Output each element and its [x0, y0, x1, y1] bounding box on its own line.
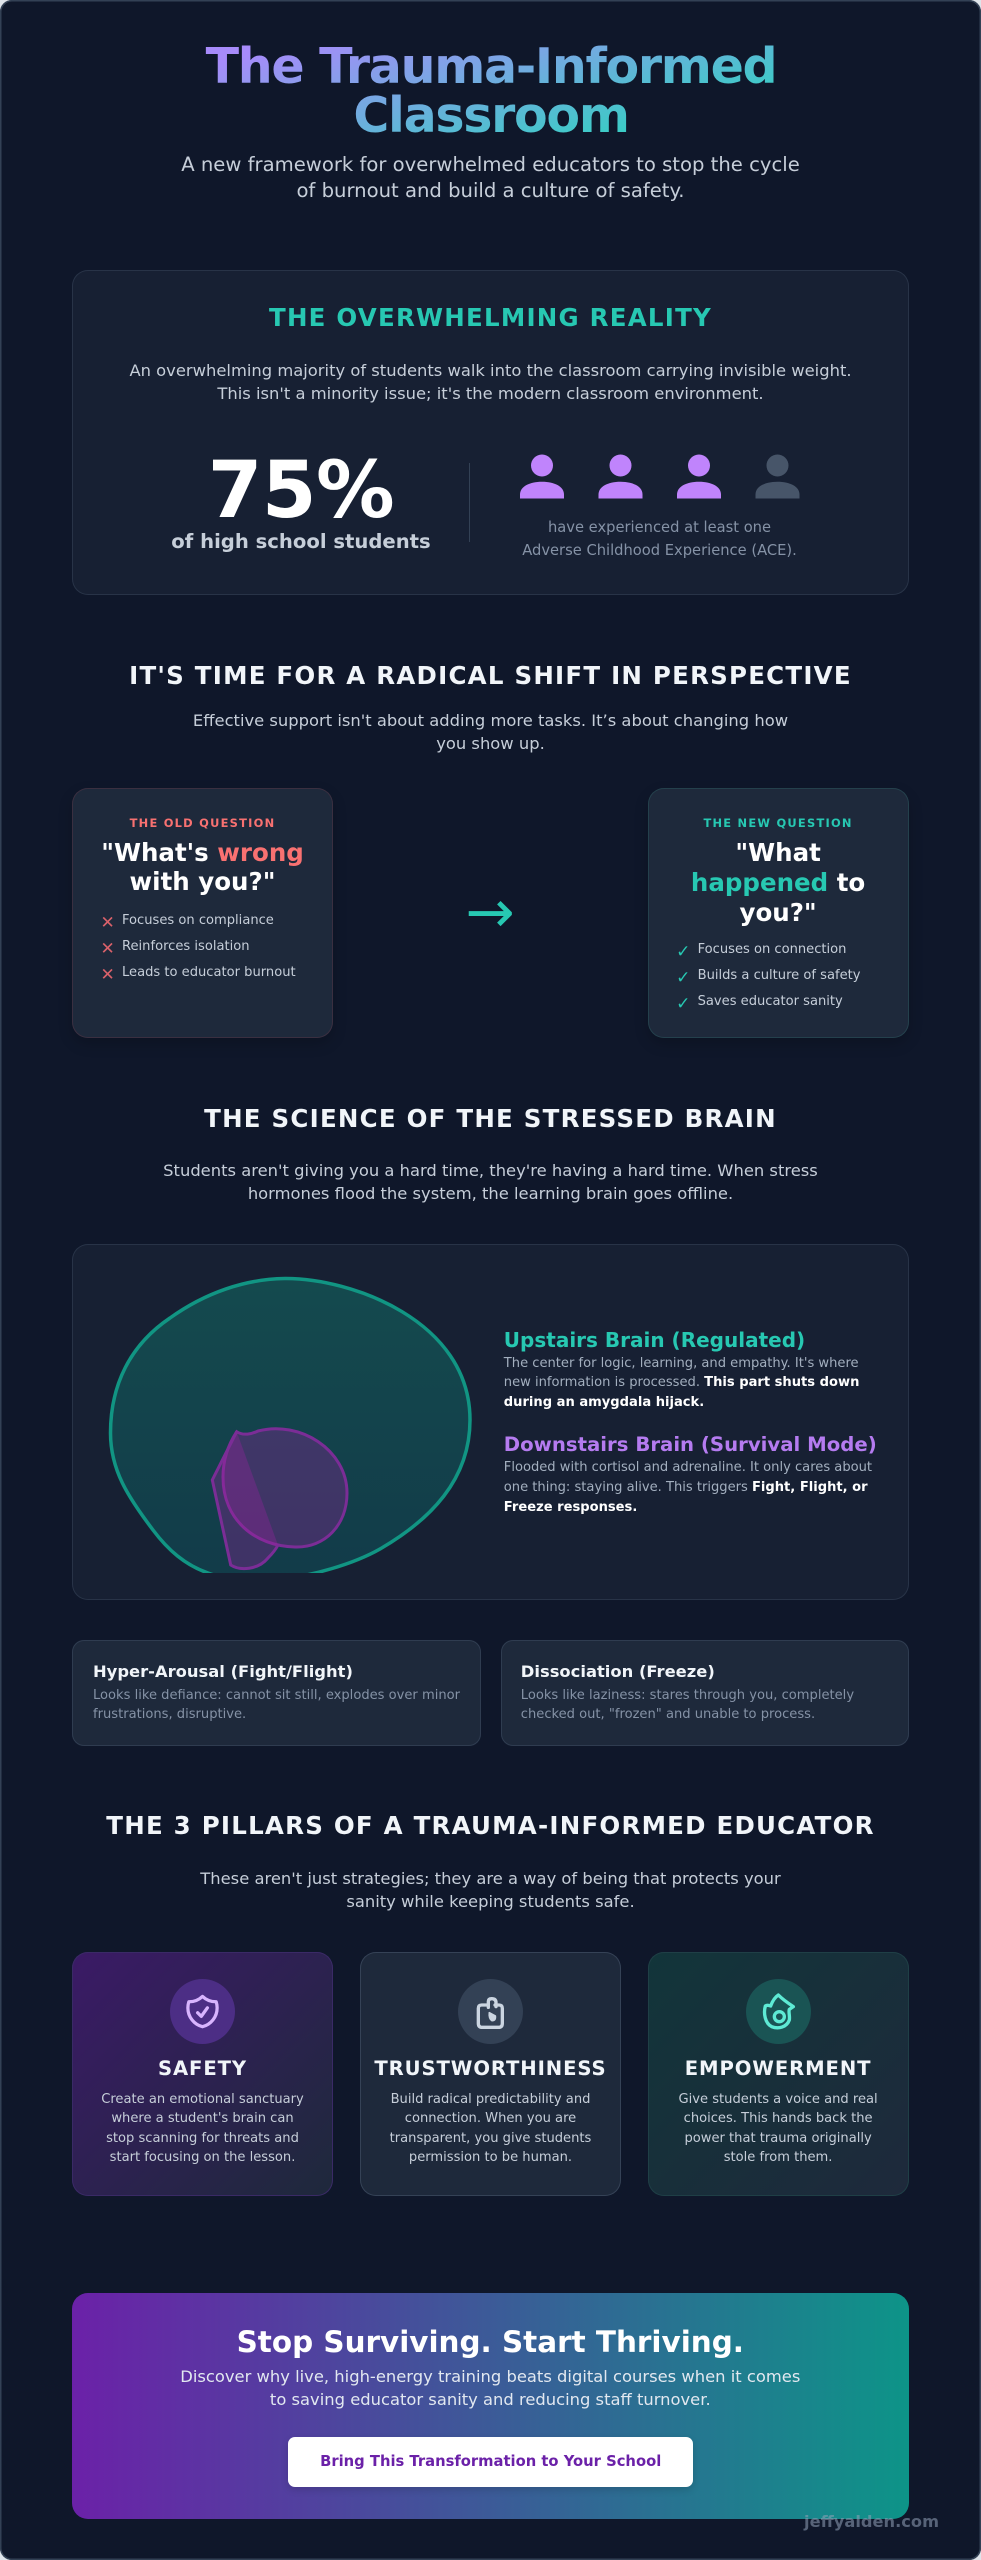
- downstairs brain text: [504, 1460, 872, 1515]
- panel: old question: [72, 788, 333, 1038]
- card text: [521, 1688, 854, 1722]
- pillar text: Create an emotional sanctuary: [101, 2092, 304, 2106]
- pillar text: transparent, you give students: [390, 2131, 591, 2146]
- pillar title: SAFETY: [158, 2057, 247, 2080]
- old question quote: with you?": [130, 867, 275, 896]
- list item 1: Focuses on compliance: [122, 912, 274, 928]
- panel: new question: [648, 788, 909, 1038]
- card: hyper-arousal: [72, 1640, 481, 1746]
- new question quote: "What: [735, 838, 821, 867]
- cta heading: Stop Surviving. Start Thriving.: [237, 2325, 744, 2359]
- list item 2: Reinforces isolation: [122, 939, 250, 954]
- brain intro text: hormones flood the system, the learning brain goes offline.: [248, 1184, 733, 1203]
- upstairs brain text: [504, 1356, 859, 1410]
- pillar text: [678, 2092, 878, 2165]
- downstairs brain text: one thing: staying alive. This triggers Fight, Flight, or: [504, 1480, 868, 1495]
- shift intro text: you show up.: [436, 734, 545, 753]
- cta button: Bring This Transformation to Your School: [320, 2453, 661, 2470]
- cta text: Discover why live, high-energy training beats digital courses when it comes: [180, 2367, 800, 2386]
- icon: flame: [746, 1979, 811, 2044]
- cta text: to saving educator sanity and reducing staff turnover.: [270, 2390, 711, 2409]
- card text: [93, 1688, 460, 1722]
- heading: radical shift: IT'S TIME FOR A RADICAL SHIFT IN PERSPECTIVE: [129, 660, 852, 690]
- pillar title: TRUSTWORTHINESS: [374, 2057, 607, 2080]
- new question quote: you?": [739, 898, 817, 927]
- icon row: 3 of 4 people: [520, 454, 800, 498]
- downstairs brain shape: [212, 1429, 347, 1569]
- title: The Trauma-Informed: [206, 37, 776, 95]
- cta text: [180, 2367, 800, 2409]
- pillars intro text: These aren't just strategies; they are a way of being that protects your: [200, 1869, 781, 1888]
- card title: Hyper-Arousal (Fight/Flight): [93, 1662, 353, 1681]
- panel: the overwhelming reality: [72, 270, 909, 595]
- icon: shield: [170, 1979, 235, 2044]
- card text: checked out, "frozen" and unable to process.: [521, 1707, 815, 1722]
- pillar title: EMPOWERMENT: [685, 2057, 871, 2080]
- pillar text: power that trauma originally: [684, 2131, 872, 2146]
- list item 3: Leads to educator burnout: [122, 964, 296, 980]
- card text: Looks like defiance: cannot sit still, explodes over minor: [93, 1688, 460, 1703]
- card title: Dissociation (Freeze): [521, 1662, 715, 1681]
- reality text: This isn't a minority issue; it's the modern classroom environment.: [217, 384, 764, 402]
- brain intro text: Students aren't giving you a hard time, they're having a hard time. When stress: [163, 1161, 818, 1180]
- upstairs brain text: during an amygdala hijack.: [504, 1395, 704, 1410]
- reality text: An overwhelming majority of students walk into the classroom carrying invisible weight.: [129, 361, 852, 380]
- subtitle: of burnout and build a culture of safety.: [296, 179, 685, 202]
- panel heading: THE OVERWHELMING REALITY: [269, 303, 712, 332]
- pillar text: connection. When you are: [405, 2111, 576, 2126]
- old question quote: "What's wrong: [101, 838, 304, 867]
- list item 3: ✕: [100, 964, 115, 984]
- panel: empowerment pillar: [648, 1952, 909, 2196]
- heading: three pillars: THE 3 PILLARS OF A TRAUMA-INFORMED EDUCATOR: [106, 1811, 875, 1840]
- list item 3: Saves educator sanity: [698, 994, 843, 1009]
- icon: person 4 inactive: [756, 454, 800, 498]
- list item 1: ✕: [100, 912, 115, 932]
- pillar text: stop scanning for threats and: [106, 2131, 299, 2146]
- reality text: [129, 361, 852, 402]
- card text: frustrations, disruptive.: [93, 1707, 246, 1722]
- new question quote: happened to: [691, 868, 865, 897]
- upstairs brain heading: Upstairs Brain (Regulated): [504, 1328, 805, 1352]
- shift intro text: Effective support isn't about adding more tasks. It’s about changing how: [193, 711, 788, 730]
- downstairs brain heading: Downstairs Brain (Survival Mode): [504, 1433, 877, 1456]
- card: dissociation: [500, 1640, 909, 1746]
- downstairs brain text: Freeze responses.: [504, 1500, 637, 1515]
- downstairs brain text: Flooded with cortisol and adrenaline. It only cares about: [504, 1460, 872, 1475]
- pillar text: start focusing on the lesson.: [110, 2150, 295, 2165]
- icon caption: have experienced at least one: [548, 518, 771, 536]
- pillars intro text: sanity while keeping students safe.: [346, 1892, 635, 1910]
- upstairs brain shape: [111, 1278, 470, 1581]
- card text: Looks like laziness: stares through you, completely: [521, 1688, 854, 1703]
- subtitle: [181, 152, 800, 202]
- list item 2: ✕: [100, 939, 115, 959]
- panel: safety pillar: [72, 1952, 333, 2196]
- list item 3: [676, 994, 843, 1014]
- icon: trust: [458, 1979, 523, 2044]
- pillar text: [390, 2092, 591, 2165]
- stat label: of high school students: [171, 530, 431, 553]
- subtitle: A new framework for overwhelmed educators to stop the cycle: [181, 152, 800, 176]
- new question quote: [691, 838, 865, 927]
- brain diagram: [108, 1276, 472, 1573]
- list item 2: [676, 968, 860, 988]
- list item 2: [100, 939, 250, 959]
- panel: brain: [72, 1244, 909, 1600]
- list item 1: [100, 912, 274, 932]
- pillar text: choices. This hands back the: [684, 2111, 873, 2126]
- watermark: jeffyalden.com: [804, 2512, 939, 2531]
- icon caption: Adverse Childhood Experience (ACE).: [522, 542, 797, 558]
- icon caption: [522, 518, 797, 558]
- divider: [469, 463, 470, 542]
- list item 1: [676, 942, 846, 962]
- list item 1: Focuses on connection: [698, 942, 846, 957]
- call to action banner: [72, 2293, 909, 2519]
- list item 2: ✓: [676, 968, 690, 988]
- brain intro text: [163, 1161, 818, 1203]
- title: [191, 42, 791, 150]
- pillar text: permission to be human.: [409, 2150, 572, 2165]
- old question quote: [101, 838, 304, 896]
- arrow: →: [465, 877, 515, 946]
- heading: stressed brain: THE SCIENCE OF THE STRESSED BRAIN: [204, 1104, 777, 1133]
- shift intro text: [193, 711, 788, 753]
- upstairs brain text: The center for logic, learning, and empathy. It's where: [504, 1356, 859, 1371]
- stat: 75%: 75%: [208, 444, 394, 536]
- list item 2: Builds a culture of safety: [698, 968, 860, 983]
- list item 3: [100, 964, 296, 984]
- pillar text: stole from them.: [724, 2150, 832, 2165]
- pillar text: [101, 2092, 304, 2165]
- pillars intro text: [200, 1869, 781, 1910]
- panel: trustworthiness pillar: [360, 1952, 621, 2196]
- pillar text: where a student's brain can: [111, 2111, 294, 2126]
- old question label: THE OLD QUESTION: [130, 816, 275, 830]
- upstairs brain text: new information is processed. This part shuts down: [504, 1375, 859, 1390]
- list item 3: ✓: [676, 994, 690, 1014]
- icon: person 1: [520, 454, 564, 498]
- icon: person 3: [677, 454, 721, 498]
- pillar text: Build radical predictability and: [391, 2092, 590, 2106]
- list item 1: ✓: [676, 942, 690, 962]
- title: Classroom: [353, 86, 629, 144]
- cta button: [288, 2437, 693, 2487]
- icon: person 2: [598, 454, 642, 498]
- new question label: THE NEW QUESTION: [703, 816, 853, 830]
- pillar text: Give students a voice and real: [678, 2092, 878, 2106]
